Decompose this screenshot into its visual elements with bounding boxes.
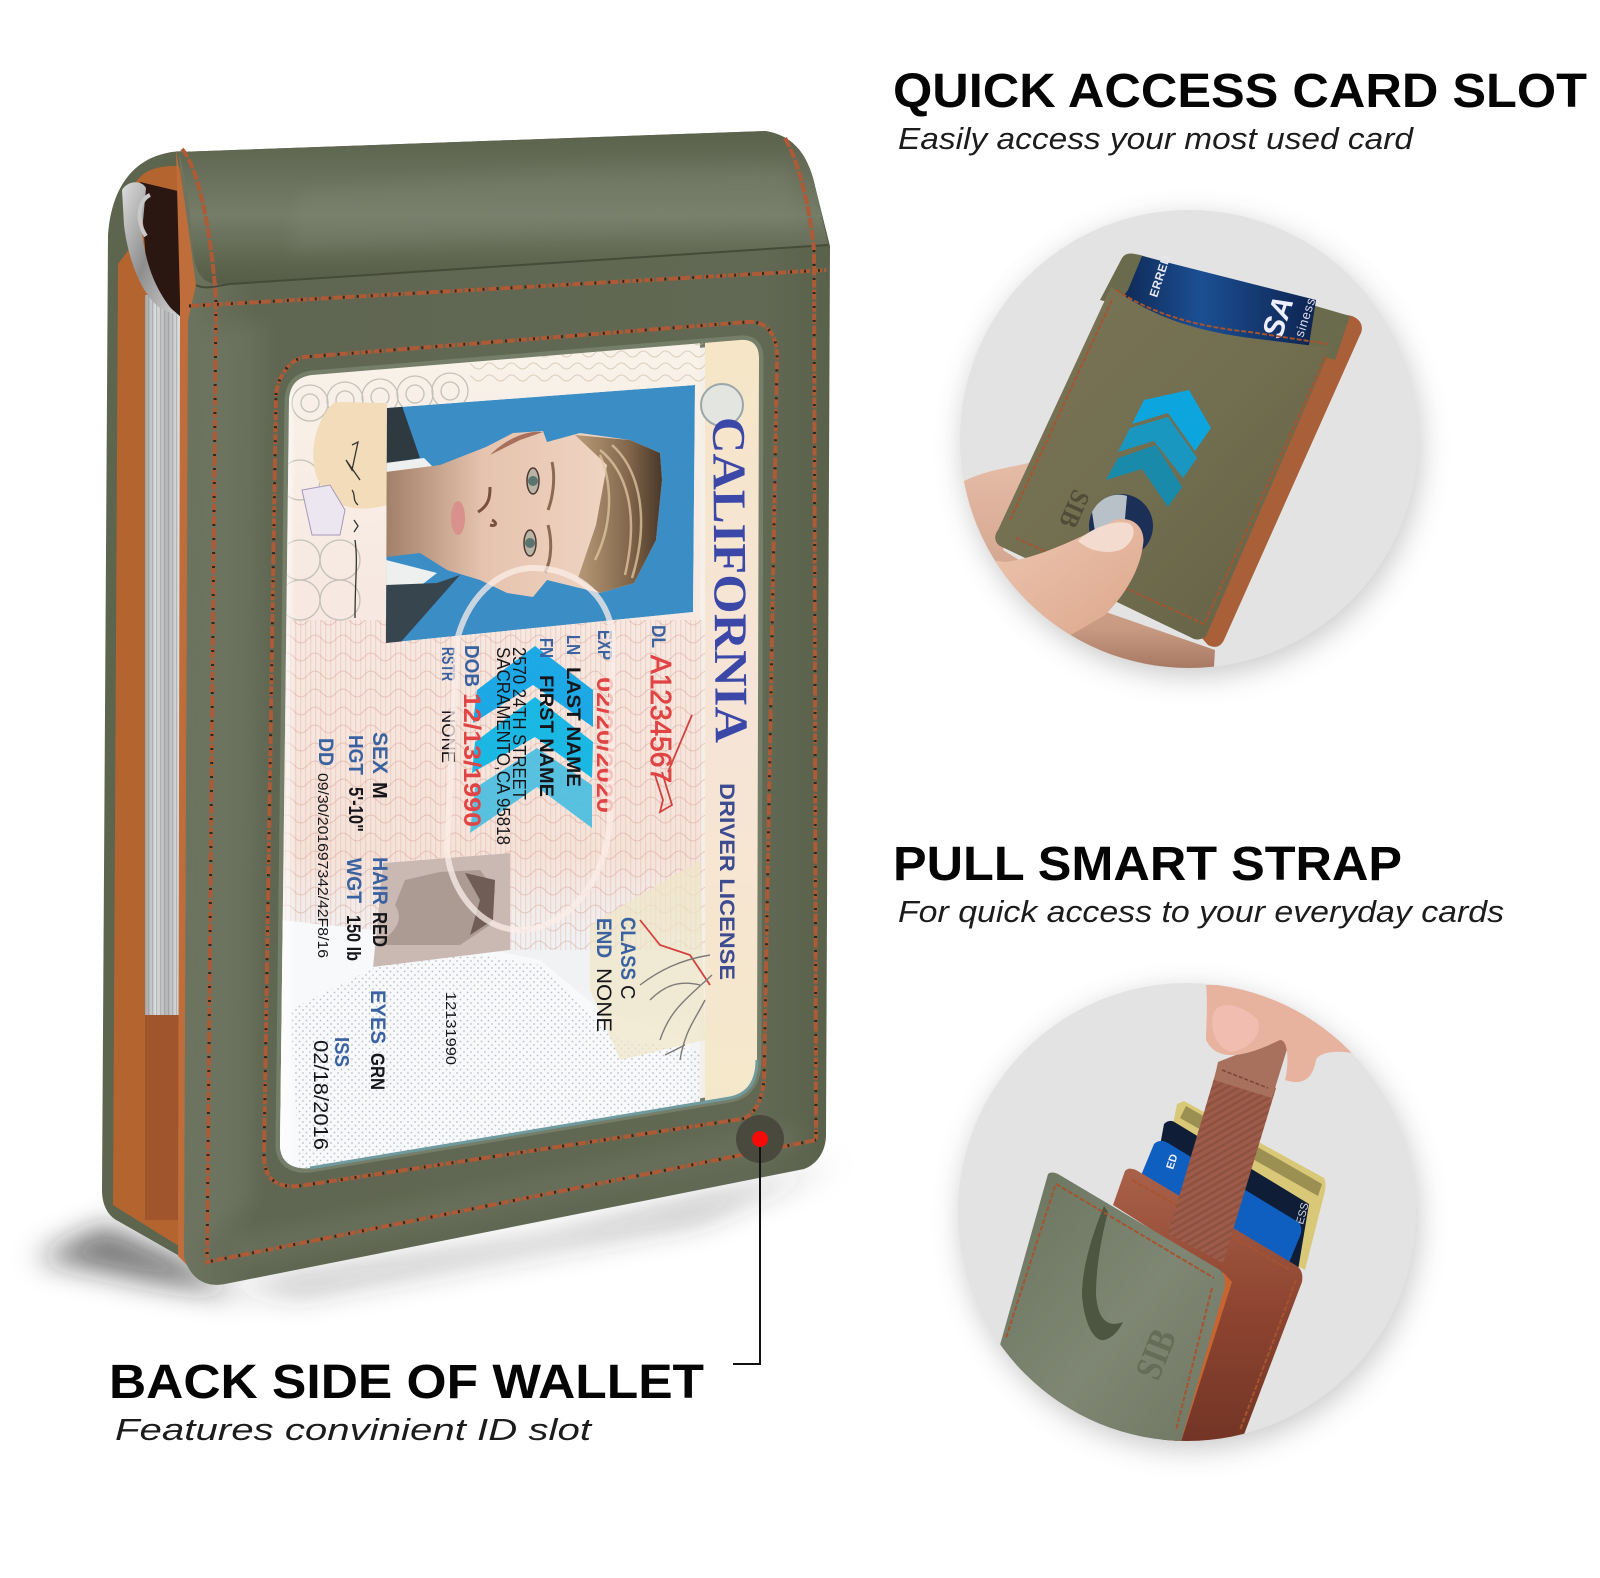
orange edge of front panel — [176, 150, 198, 1270]
ID text: EYES — [366, 990, 389, 1044]
ID text: SEX — [368, 732, 391, 774]
state outline map — [640, 715, 710, 985]
brown rear panel — [1113, 1169, 1302, 1445]
navy card: A — [1269, 1217, 1294, 1236]
ID window frame — [280, 340, 759, 1168]
ID text: 09/30/201697342/42F8/16 — [314, 773, 331, 958]
ID text: FN — [536, 638, 556, 658]
orange interior — [113, 166, 192, 1248]
hair strands — [595, 445, 641, 578]
thumb slot oval — [447, 568, 613, 930]
navy card — [1150, 1121, 1312, 1270]
wallet ground shadow — [35, 1160, 845, 1296]
state name: CALIFORNIA — [702, 417, 757, 743]
California seal — [701, 384, 743, 426]
circle shadow — [961, 991, 1419, 1449]
ID text: WGT — [342, 858, 365, 903]
card in slot — [1124, 256, 1316, 346]
flap crease — [196, 245, 828, 287]
lower interior leather — [145, 1005, 181, 1220]
navy card text: ESS — [1294, 1201, 1312, 1226]
back leather — [1100, 253, 1350, 360]
main wallet illustration — [35, 131, 845, 1296]
fingernail — [1212, 1005, 1259, 1052]
ID text: CLASS — [616, 917, 639, 980]
panel highlights — [200, 320, 800, 1265]
pull strap — [1168, 1037, 1289, 1263]
blue card — [1135, 1141, 1301, 1265]
marker halo — [736, 1115, 784, 1163]
nose — [478, 487, 496, 525]
card background — [270, 330, 700, 1180]
stitching — [182, 138, 826, 1262]
thumb hole — [1089, 494, 1153, 558]
pocket stitching — [1010, 290, 1328, 624]
eyes — [527, 468, 539, 494]
circle panel: quick access card slot — [960, 210, 1421, 700]
ID text: C — [616, 985, 638, 999]
mouth — [451, 501, 465, 535]
ID text: HGT — [344, 735, 366, 775]
ID text: 12/13/1990 — [458, 693, 485, 827]
ID text: LAST NAME — [562, 667, 583, 787]
ID text: NONE — [592, 968, 615, 1032]
ID text: RSTR — [438, 647, 458, 681]
circle background — [958, 983, 1416, 1441]
heading: back side of wallet: BACK SIDE OF WALLET — [109, 1356, 704, 1409]
ID text: 2570 24TH STREET — [509, 647, 529, 800]
butterfly — [302, 485, 345, 535]
chevrons on card — [470, 646, 593, 833]
fingers — [1206, 985, 1360, 1082]
circle shadow — [963, 218, 1421, 676]
up chevrons — [1106, 390, 1211, 507]
thumbnail — [1078, 522, 1134, 552]
wallet in hand — [962, 253, 1362, 700]
river drawing — [640, 955, 712, 1060]
front panel — [178, 131, 830, 1285]
left window glare — [280, 386, 294, 1164]
circle background — [960, 210, 1418, 668]
panel stitching — [1006, 1180, 1296, 1430]
front olive panel — [995, 287, 1331, 640]
ID text: FIRST NAME — [535, 675, 556, 797]
ID text: A1234567 — [644, 655, 676, 783]
thumb — [975, 519, 1143, 640]
ID text: END — [592, 918, 615, 958]
wallet with strap — [1000, 985, 1360, 1445]
marker dot — [752, 1131, 768, 1147]
ID text: NONE — [438, 710, 458, 763]
ID text: DD — [314, 738, 337, 766]
ID text: EXP — [593, 630, 615, 660]
card text: ERRED — [1147, 253, 1173, 299]
ID text: DL — [647, 625, 668, 648]
brows — [545, 462, 554, 572]
card pages — [145, 295, 181, 1015]
finger slot — [1082, 1206, 1123, 1340]
ID text: 150 lb — [342, 915, 363, 961]
top concentric circles — [280, 373, 468, 620]
circle panel: pull smart strap — [958, 983, 1419, 1449]
top flap — [178, 131, 828, 284]
ID card — [270, 330, 762, 1190]
ID text: 02/18/2016 — [309, 1040, 331, 1150]
heading: pull strap: PULL SMART STRAP — [893, 838, 1402, 891]
brand emboss: SIB — [1053, 486, 1096, 532]
subheading: pull strap: For quick access to your everyday cards — [898, 894, 1504, 929]
flap highlight — [290, 165, 800, 250]
money clip — [122, 182, 182, 318]
ID text: HAIR — [368, 857, 391, 905]
tan stamp behind signature — [313, 402, 387, 509]
olive front panel — [1000, 1172, 1225, 1445]
ID text: SACRAMENTO,CA 95818 — [493, 647, 513, 845]
window teal edge — [310, 1060, 757, 1168]
callout: back side marker — [733, 1115, 784, 1364]
wallet back shell — [102, 151, 205, 1262]
heading: quick access: QUICK ACCESS CARD SLOT — [893, 65, 1587, 118]
subheading: quick access: Easily access your most used card — [898, 121, 1415, 156]
ID text: DOB — [460, 645, 482, 687]
ID text: 12131990 — [442, 992, 459, 1065]
hand behind wallet — [964, 462, 1215, 668]
guilloche texture — [280, 340, 705, 1180]
card text: ED — [1164, 1153, 1181, 1171]
ID text: LN — [563, 635, 583, 655]
card in slot: SA — [1256, 292, 1301, 342]
orange side edge — [1165, 1272, 1232, 1445]
ID text: ISS — [330, 1037, 352, 1067]
ID text — [309, 417, 757, 1150]
ID text: RED — [368, 912, 390, 947]
orange wallet side — [1200, 312, 1362, 647]
ghost portrait — [373, 853, 510, 967]
tan right strip — [705, 330, 762, 1110]
ID text: M — [368, 782, 390, 799]
signature — [346, 442, 360, 618]
ID text: GRN — [366, 1053, 387, 1090]
gold card — [1160, 1101, 1326, 1270]
ID text: 02/20/2020 — [592, 677, 618, 813]
brand emboss: SIB — [1127, 1323, 1185, 1385]
ID text: 5'-10" — [344, 787, 366, 832]
portrait photo — [386, 385, 695, 643]
card in slot: siness — [1292, 296, 1318, 339]
licence title: DRIVER LICENSE — [715, 783, 738, 980]
subheading: back side: Features convinient ID slot — [115, 1412, 593, 1447]
leader line — [733, 1147, 760, 1364]
